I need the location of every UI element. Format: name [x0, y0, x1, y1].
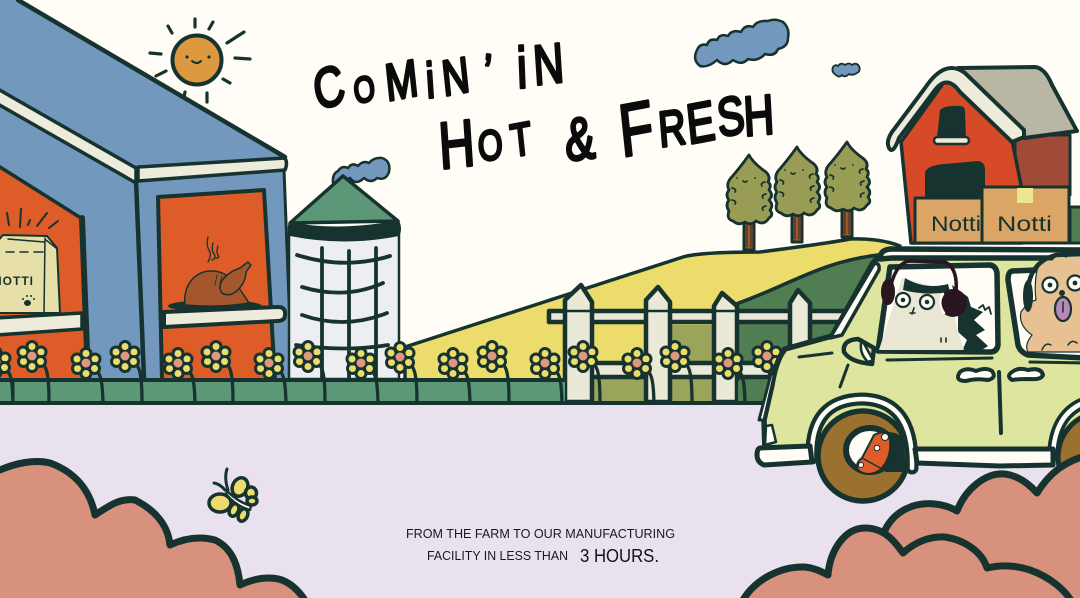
trees	[727, 142, 870, 250]
grain silo	[288, 158, 401, 379]
title line 2: F	[615, 85, 657, 173]
door handle rear	[1009, 369, 1043, 380]
roast turkey	[168, 237, 262, 312]
window with dog	[1008, 254, 1080, 358]
flowers row	[0, 342, 784, 409]
bird in wheel	[857, 432, 890, 474]
caption highlight: 3 HOURS.	[580, 546, 659, 566]
green car	[757, 249, 1080, 502]
caption line 1: FROM THE FARM TO OUR MANUFACTURING	[406, 527, 675, 541]
title: i	[516, 35, 528, 100]
right shelf	[164, 307, 285, 327]
title line 2: O	[476, 120, 504, 170]
title line 2: H	[742, 84, 775, 148]
left oven window	[0, 167, 88, 378]
box right	[982, 187, 1069, 243]
side mirror	[844, 339, 874, 364]
title: N	[439, 47, 472, 107]
caption line 2: FACILITY IN LESS THAN	[427, 549, 568, 563]
small grille light	[765, 425, 776, 445]
white picket fence	[549, 285, 849, 402]
box left	[915, 198, 983, 243]
butterfly	[209, 469, 257, 523]
left shelf	[0, 313, 82, 335]
cloud small	[832, 64, 860, 76]
cloud large	[695, 20, 788, 66]
blue factory building	[0, 0, 292, 380]
title line 2: R	[656, 99, 688, 158]
windshield strip	[830, 264, 879, 338]
background sky	[0, 0, 1080, 405]
bush right front	[743, 528, 1072, 598]
title: M	[382, 48, 421, 112]
sun	[150, 19, 250, 102]
right oven window	[158, 190, 285, 380]
side skirt	[915, 449, 1053, 466]
smoke	[333, 158, 389, 183]
bush left	[0, 461, 306, 598]
box left: Notti	[931, 213, 981, 236]
rear wheel	[1053, 398, 1080, 502]
title: ’	[481, 44, 493, 98]
front eave trim	[138, 158, 286, 181]
title: N	[531, 32, 566, 97]
red barn	[888, 67, 1080, 243]
title line 2: S	[714, 85, 747, 149]
title line 2: E	[684, 90, 718, 156]
slanted eave trim	[0, 88, 136, 183]
road	[0, 405, 1080, 598]
title line 2: H	[437, 106, 477, 184]
title: i	[424, 53, 436, 109]
feed bag	[0, 209, 60, 313]
title line 2: &	[563, 105, 597, 175]
silo grid	[296, 248, 390, 379]
title: O	[351, 67, 377, 112]
roof rail	[880, 249, 1080, 259]
car body	[764, 255, 1080, 455]
bush right back	[885, 456, 1080, 598]
box right: Notti	[997, 213, 1052, 236]
front bumper	[757, 446, 812, 465]
title line 2: T	[508, 112, 534, 167]
ground strip	[0, 378, 800, 406]
door handle front	[958, 369, 994, 381]
headlight strip	[759, 372, 774, 420]
window with cat	[878, 261, 998, 352]
title: C	[308, 52, 350, 123]
door details	[799, 353, 1080, 387]
front wheel	[812, 399, 912, 501]
hills	[405, 239, 900, 403]
